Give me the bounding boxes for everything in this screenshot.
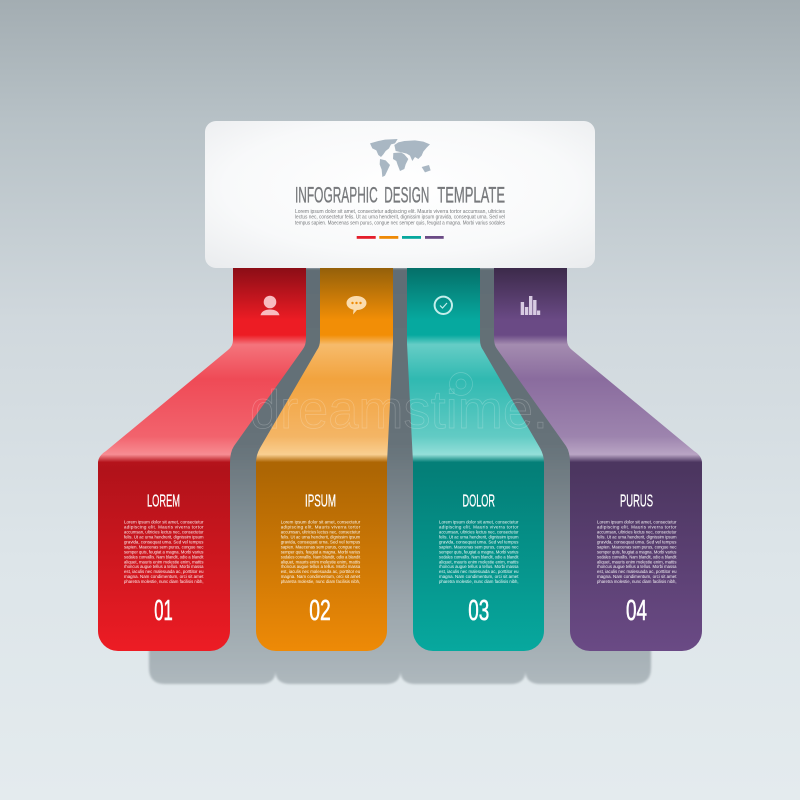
ribbon cast shadow [149, 268, 651, 684]
body text: lorem [124, 520, 204, 584]
colour key bars [357, 236, 444, 239]
panel description: Lorem ipsum dolor sit amet, consectetur adipiscing elit. Mauris viverra tortor accumsan, ultricies [295, 209, 505, 215]
ribbon 2: orange [256, 268, 393, 651]
body text: dolor: semper quis, feugiat a magna. Morbi varius [439, 549, 519, 554]
body text: lorem: accumsan, ultricies lectus nec, consectetur [124, 530, 204, 534]
body text: lorem: felis. Ut ac urna hendrerit, dignissim ipsum [124, 534, 204, 539]
body text: purus: sapien. Maecenas sem purus, congue nec [597, 544, 677, 549]
body text: ipsum: accumsan, ultricies lectus nec, consectetur [281, 530, 361, 534]
body text: purus: gravida, consequat urna. Sed vel tempus [597, 539, 677, 544]
body text: dolor: felis. Ut ac urna hendrerit, dignissim ipsum [439, 534, 519, 539]
body text: dolor: accumsan, ultricies lectus nec, consectetur [439, 530, 519, 534]
number 04: 04 [626, 595, 647, 627]
body text: ipsum: sodales convallis. Nam blandit, odio a blandit [281, 554, 361, 559]
number 01: 01 [154, 595, 173, 627]
body text: lorem: rhoncus augue tellus a tellus. Morbi massa [124, 564, 204, 569]
body text: ipsum: rhoncus augue tellus a tellus. Morbi massa [281, 564, 361, 569]
body text: ipsum [281, 520, 361, 584]
body text: ipsum: magna. Nam condimentum, orci sit amet [281, 574, 361, 579]
body text: dolor: sapien. Maecenas sem purus, congue nec [439, 544, 519, 549]
body text: lorem: semper quis, feugiat a magna. Morbi varius [124, 549, 204, 554]
body text: dolor: est, iaculis nec malesuada ac, porttitor eu [439, 569, 519, 574]
body text: purus: Lorem ipsum dolor sit amet, consectetur [597, 520, 677, 524]
body text: purus [597, 520, 677, 584]
body text: ipsum: gravida, consequat urna. Sed vel tempus [281, 539, 361, 544]
number 02: 02 [309, 595, 331, 627]
body text: lorem: adipiscing elit. Mauris viverra tortor [124, 524, 204, 530]
red ribbon shape [98, 268, 306, 651]
panel heading: INFOGRAPHIC [295, 182, 378, 208]
body text: ipsum: sapien. Maecenas sem purus, congue nec [281, 544, 361, 549]
body text: purus: est, iaculis nec malesuada ac, porttitor eu [597, 569, 677, 574]
panel description [295, 209, 505, 226]
panel heading: TEMPLATE [437, 182, 505, 208]
body text: dolor: rhoncus augue tellus a tellus. Morbi massa [439, 564, 519, 569]
body text: ipsum: semper quis, feugiat a magna. Morbi varius [281, 549, 361, 554]
body text: ipsum: est, iaculis nec malesuada ac, porttitor eu [281, 569, 361, 574]
body text: lorem: magna. Nam condimentum, orci sit amet [124, 574, 204, 579]
icon: clock [435, 297, 452, 314]
body text: dolor: pharetra molestie, nunc diam facilisis nibh, [439, 579, 518, 584]
teal ribbon shape [407, 268, 544, 651]
body text: dolor: Lorem ipsum dolor sit amet, consectetur [439, 520, 519, 524]
body text: purus: rhoncus augue tellus a tellus. Morbi massa [597, 564, 677, 569]
body text: lorem: gravida, consequat urna. Sed vel tempus [124, 539, 204, 544]
panel card [205, 121, 595, 268]
number 03: 03 [468, 595, 489, 627]
body text: ipsum: Lorem ipsum dolor sit amet, consectetur [281, 520, 361, 524]
ribbon 1: red [98, 268, 306, 651]
body text: lorem: sodales convallis. Nam blandit, odio a blandit [124, 554, 204, 559]
panel heading: DESIGN [384, 182, 429, 208]
body text: lorem: Lorem ipsum dolor sit amet, consectetur [124, 520, 204, 524]
body text: lorem: est, iaculis nec malesuada ac, porttitor eu [124, 569, 204, 574]
body text: dolor: sodales convallis. Nam blandit, odio a blandit [439, 554, 519, 559]
body text: ipsum: felis. Ut ac urna hendrerit, dignissim ipsum [281, 534, 360, 539]
body text: purus: sodales convallis. Nam blandit, odio a blandit [597, 554, 677, 559]
watermark: dreamstime. [250, 380, 548, 440]
ribbon 3: teal [407, 268, 544, 651]
body text: purus: felis. Ut ac urna hendrerit, dignissim ipsum [597, 534, 677, 539]
label: purus: PURUS [620, 490, 653, 510]
panel description: tempus sapien. Maecenas sem purus, congue nec semper quis, feugiat a magna. Morbi varius sodales [295, 220, 505, 226]
body text: lorem: sapien. Maecenas sem purus, congue nec [124, 544, 204, 549]
body text: purus: accumsan, ultricies lectus nec, consectetur [597, 530, 677, 534]
body text: lorem: aliquet, mauris enim molestie enim, mattis [124, 559, 204, 564]
header panel [205, 121, 595, 268]
icon: world map [370, 139, 431, 177]
body text: purus: pharetra molestie, nunc diam facilisis nibh, [597, 579, 676, 584]
body text: lorem: pharetra molestie, nunc diam facilisis nibh, [124, 579, 204, 584]
label: dolor: DOLOR [462, 490, 495, 510]
body text: dolor [439, 520, 519, 584]
body text: dolor: aliquet, mauris enim molestie enim, mattis [439, 559, 519, 564]
ribbon 4: purple [494, 268, 702, 651]
body text: ipsum: adipiscing elit. Mauris viverra tortor [281, 524, 361, 530]
icon: bar chart [521, 296, 540, 315]
panel description: lectus nec, consectetur felis. Ut ac urna hendrerit, dignissim ipsum gravida, consequat urna. Sed vel [295, 215, 505, 221]
purple ribbon shape [494, 268, 702, 651]
label: ipsum: IPSUM [305, 490, 336, 510]
body text: purus: magna. Nam condimentum, orci sit amet [597, 574, 677, 579]
icon: person [260, 296, 280, 315]
body text: ipsum: pharetra molestie, nunc diam facilisis nibh, [281, 579, 360, 584]
label: lorem: LOREM [147, 490, 180, 510]
orange ribbon shape [256, 268, 393, 651]
body text: purus: adipiscing elit. Mauris viverra tortor [597, 524, 677, 530]
icon: speech bubble [346, 296, 366, 314]
body text: purus: aliquet, mauris enim molestie enim, mattis [597, 559, 677, 564]
body text: ipsum: aliquet, mauris enim molestie enim, mattis [281, 559, 361, 564]
body text: purus: semper quis, feugiat a magna. Morbi varius [597, 549, 677, 554]
body text: dolor: gravida, consequat urna. Sed vel tempus [439, 539, 519, 544]
body text: dolor: adipiscing elit. Mauris viverra tortor [439, 524, 519, 530]
body text: dolor: magna. Nam condimentum, orci sit amet [439, 574, 519, 579]
